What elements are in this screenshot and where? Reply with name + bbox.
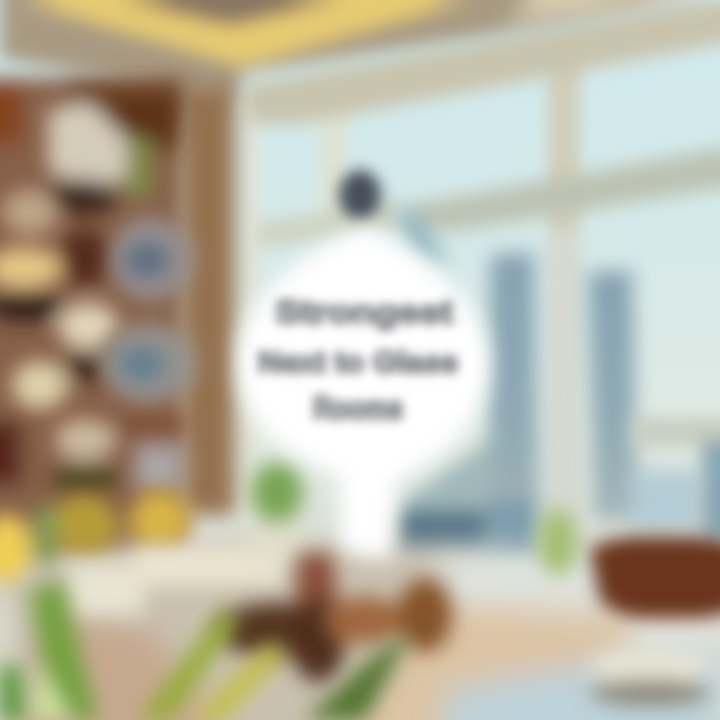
shelf objects: [0, 85, 183, 493]
skyline towers: [392, 206, 700, 560]
green plants: [251, 462, 578, 575]
white bowl on table: [590, 648, 710, 705]
horizontal window beams: [245, 0, 720, 232]
bubble title text: Strongest: [275, 294, 453, 330]
wooden column: [180, 85, 235, 515]
bubble title text: [258, 294, 458, 426]
pin head: [339, 170, 381, 220]
circular label with pin: [238, 170, 488, 560]
right edge tower: [632, 418, 720, 540]
ceiling: [0, 0, 720, 100]
yellow vases: [0, 490, 190, 582]
bubble title text: Next to Glass: [258, 346, 458, 379]
brown chair: [590, 537, 720, 618]
bookshelf wall: [0, 78, 185, 558]
brown foreground flower: [217, 553, 452, 682]
blue shelf plates: [100, 217, 196, 403]
white bubble: [238, 226, 488, 560]
foreground plant leaves: [0, 580, 412, 720]
white counter: [0, 513, 305, 670]
bubble title text: Rooms: [313, 390, 403, 426]
window frames: [240, 50, 582, 530]
counter and floor: [0, 545, 720, 720]
